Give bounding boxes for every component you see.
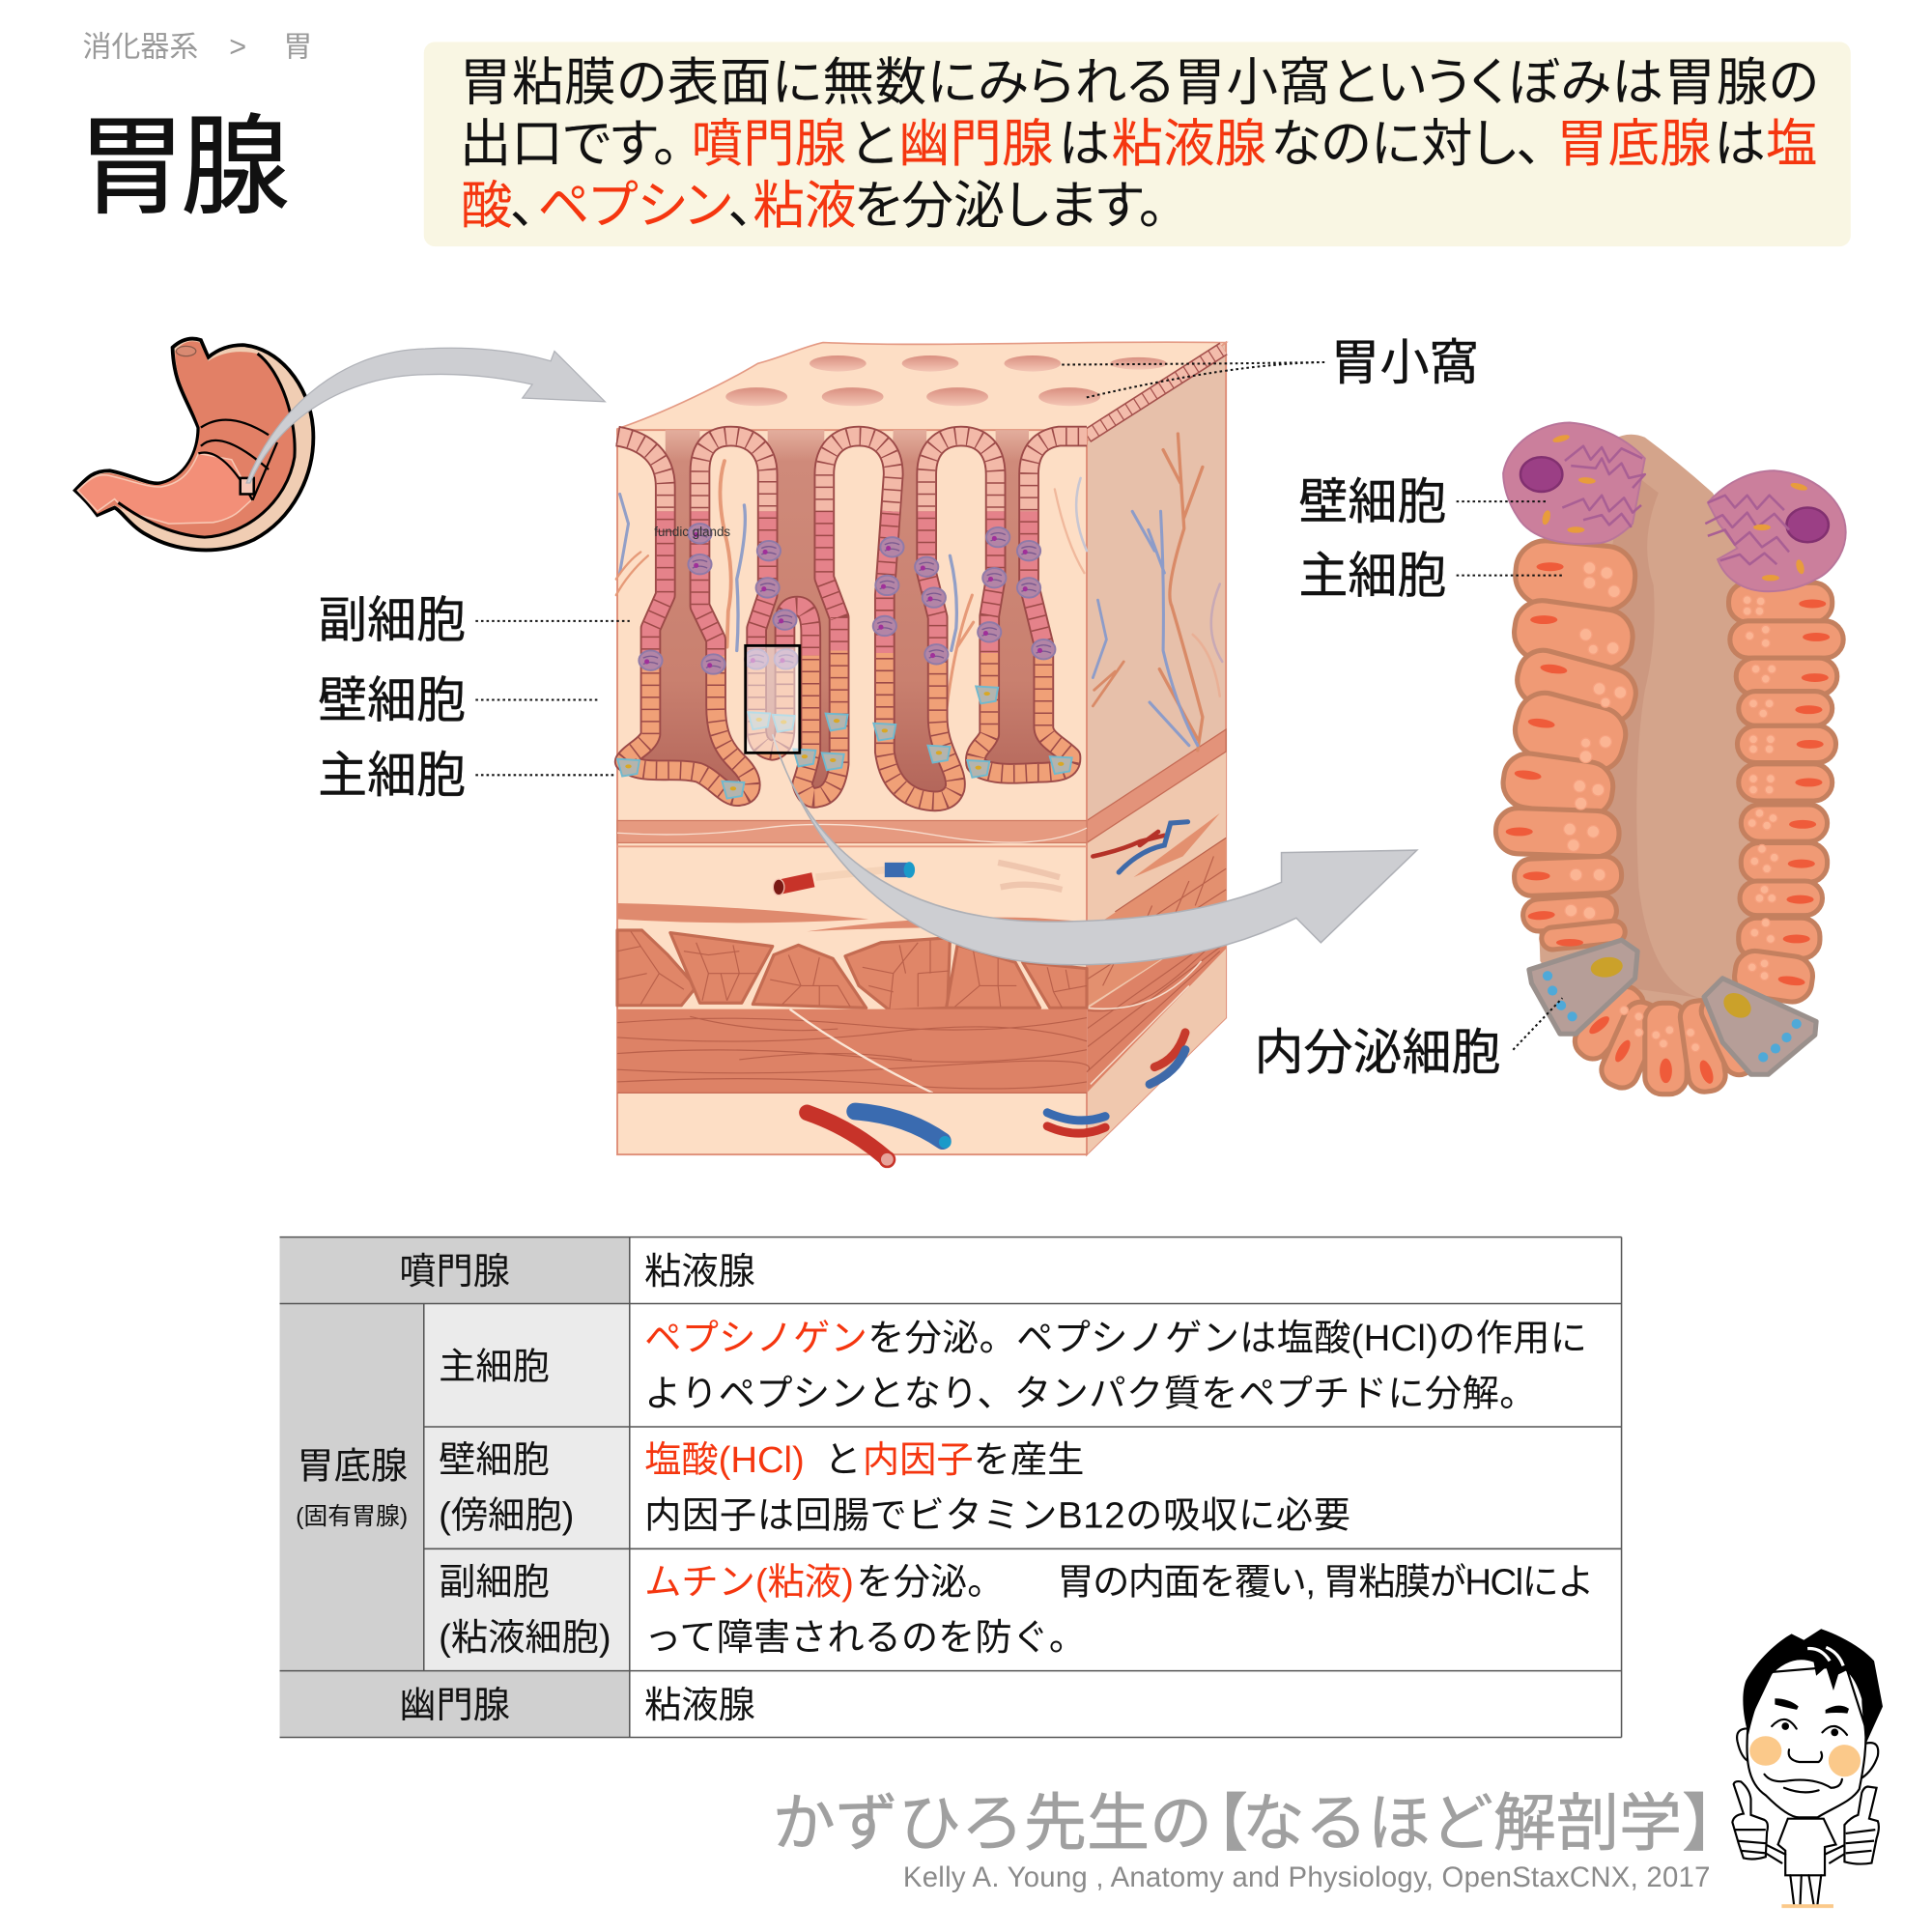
table fills xyxy=(280,1237,1622,1737)
block: front vessels in lamina xyxy=(616,461,1087,711)
hair highlights xyxy=(1807,1647,1843,1665)
label: 壁細胞 right: 壁細胞 xyxy=(1298,474,1446,529)
breadcrumb xyxy=(82,31,312,64)
intro text panel: 、 xyxy=(728,178,754,235)
icon: stomach xyxy=(75,339,313,550)
block: submucosa vessels xyxy=(773,862,1062,895)
row: 壁細胞: 塩酸(HCl) xyxy=(644,1439,805,1481)
row: 副細胞: 胃の内面を覆い, 胃粘膜がHClによ xyxy=(1057,1562,1595,1604)
body xyxy=(1778,1819,1836,1875)
block: muscle fascicles xyxy=(617,930,1087,1010)
selection box on gland xyxy=(746,645,800,753)
footer brand: かずひろ先生の xyxy=(773,1787,1212,1858)
arrow: gland to enlarged view xyxy=(773,734,1417,965)
breadcrumb: 胃 xyxy=(283,32,312,64)
arms and legs xyxy=(1766,1844,1846,1905)
block: muscle band xyxy=(617,903,1087,931)
row: 主細胞: 主細胞 xyxy=(439,1346,550,1387)
block: front face xyxy=(617,430,1087,1154)
row: 胃底腺 heading: 胃底腺 xyxy=(297,1446,408,1488)
row: 壁細胞: 内因子は回腸でビタミンB12の吸収に必要 xyxy=(644,1495,1350,1537)
block: side vessels red blue xyxy=(1093,822,1188,1084)
ears xyxy=(1737,1728,1878,1778)
footer credit: Kelly A. Young , Anatomy and Physiology, OpenStaxCNX, 2017 xyxy=(903,1861,1710,1893)
row: 副細胞 xyxy=(439,1562,1595,1659)
label: 胃小窩 with leaders xyxy=(1060,335,1479,398)
facial features xyxy=(1765,1699,1848,1792)
row: 噴門腺 xyxy=(399,1251,755,1293)
cheeks xyxy=(1749,1736,1861,1776)
title: 胃腺 xyxy=(77,106,287,228)
row: 壁細胞: 内因子 xyxy=(863,1439,974,1481)
block: circular muscle band xyxy=(617,1009,1090,1093)
block: parietal cells in glands xyxy=(639,524,1055,674)
icon: doctor caricature xyxy=(1732,1629,1883,1906)
row: 噴門腺: 噴門腺 xyxy=(399,1251,510,1293)
row: 副細胞: (粘液細胞) xyxy=(439,1617,611,1659)
row: 主細胞 xyxy=(439,1318,1587,1414)
intro text panel: と xyxy=(850,116,895,173)
label: 内分泌細胞: 内分泌細胞 xyxy=(1254,1025,1501,1080)
intro text panel: なのに対し、 xyxy=(1270,116,1542,173)
left column cells xyxy=(1495,538,1641,951)
block: gastric pits and lumens xyxy=(629,430,1070,799)
bottom cells xyxy=(1569,980,1761,1094)
row: 噴門腺: 粘液腺 xyxy=(644,1251,755,1293)
label: 壁細胞 left: 壁細胞 xyxy=(318,672,466,727)
breadcrumb: 消化器系 xyxy=(82,32,198,64)
enlarged gastric gland xyxy=(1495,423,1846,1094)
block: right side face xyxy=(1087,343,1226,1154)
footer brand: なるほど解剖学 xyxy=(1242,1787,1682,1858)
block: side face vessels xyxy=(1093,434,1222,751)
row: 壁細胞 xyxy=(439,1439,1350,1537)
block: muscularis mucosae xyxy=(617,820,1087,846)
row: 壁細胞: と xyxy=(824,1439,862,1481)
intro text panel: 、 xyxy=(510,178,536,235)
footer brand: 】 xyxy=(1682,1787,1745,1858)
hair xyxy=(1743,1629,1883,1745)
block label: fundic glands: fundic glands xyxy=(654,525,730,539)
intro text panel: は xyxy=(1059,116,1110,173)
right hand xyxy=(1844,1786,1879,1864)
block: submucosal large vessels xyxy=(807,1112,1105,1167)
row: 副細胞: って障害されるのを防ぐ。 xyxy=(644,1617,1086,1659)
row: 壁細胞: 壁細胞 xyxy=(439,1439,550,1481)
intro text panel: 酸 xyxy=(461,178,513,235)
table xyxy=(280,1237,1622,1737)
endocrine cell left xyxy=(1529,940,1637,1034)
arrow: stomach to tissue block xyxy=(246,348,605,483)
label: 副細胞 left: 副細胞 xyxy=(318,592,466,647)
intro text panel: 幽門腺 xyxy=(898,116,1054,173)
label: 内分泌細胞 xyxy=(1254,998,1562,1080)
row: 主細胞: ペプシノゲンを分泌。ペプシノゲンは塩酸(HCl)の作用に xyxy=(644,1318,1587,1359)
face xyxy=(1747,1665,1865,1817)
intro text panel: 塩 xyxy=(1766,116,1817,173)
intro text panel: を分泌します。 xyxy=(854,178,1164,235)
label: 胃小窩 with leaders: 胃小窩 xyxy=(1331,335,1479,390)
row: 副細胞: 副細胞 xyxy=(439,1562,550,1604)
intro text panel: 粘液腺 xyxy=(1112,116,1266,173)
label: 主細胞 left: 主細胞 xyxy=(318,748,466,803)
block: endocrine cells in glands xyxy=(617,686,1072,799)
row: 胃底腺 heading: (固有胃腺) xyxy=(296,1503,408,1530)
footer brand: 【 xyxy=(1185,1787,1248,1858)
block: gland walls xyxy=(617,437,1087,801)
row: 幽門腺 xyxy=(399,1685,755,1726)
row: 壁細胞: を産生 xyxy=(974,1439,1084,1481)
intro text panel: 胃底腺 xyxy=(1556,116,1712,173)
breadcrumb: > xyxy=(229,31,246,64)
label: 主細胞 right: 主細胞 xyxy=(1298,549,1446,604)
intro text panel: 胃粘膜の表面に無数にみられる胃小窩というくぼみは胃腺の xyxy=(460,54,1819,111)
left hand xyxy=(1732,1781,1768,1859)
tissue block xyxy=(616,342,1226,1167)
row: 副細胞: を分泌。 xyxy=(856,1562,1004,1604)
intro text panel: は xyxy=(1714,116,1766,173)
intro text panel: ペプシン xyxy=(537,178,731,235)
parietal cell left xyxy=(1503,423,1645,544)
intro text panel: 粘液 xyxy=(753,178,856,235)
right column cells xyxy=(1729,582,1843,1005)
row: 幽門腺: 幽門腺 xyxy=(399,1685,510,1726)
endocrine cell right xyxy=(1704,979,1816,1074)
row: 主細胞: よりペプシンとなり、タンパク質をペプチドに分解。 xyxy=(644,1373,1537,1414)
gland lumen xyxy=(1528,435,1775,1072)
intro text panel: 噴門腺 xyxy=(692,116,846,173)
intro text panel xyxy=(424,42,1851,246)
row: 副細胞: ムチン(粘液) xyxy=(644,1562,854,1604)
row: 胃底腺 heading xyxy=(296,1446,408,1530)
foot shadow xyxy=(1781,1905,1833,1908)
parietal cell right xyxy=(1705,470,1846,591)
intro text panel: 出口です。 xyxy=(460,116,678,173)
block: top surface xyxy=(617,342,1226,441)
row: 壁細胞: (傍細胞) xyxy=(439,1495,574,1537)
row: 幽門腺: 粘液腺 xyxy=(644,1685,755,1726)
